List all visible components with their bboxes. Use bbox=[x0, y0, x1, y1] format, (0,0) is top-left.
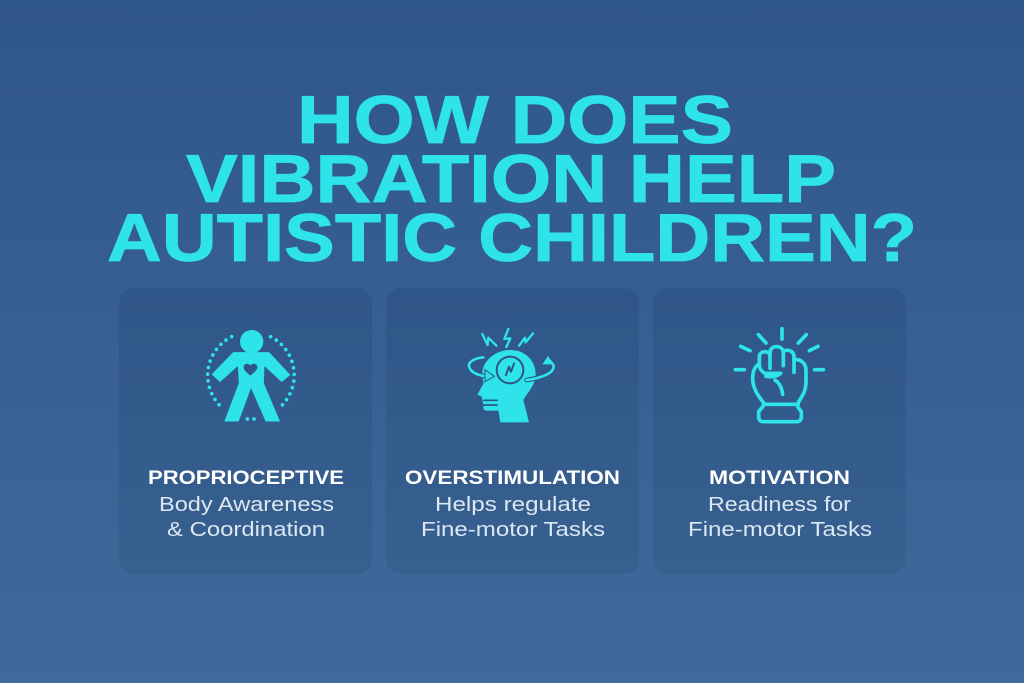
heading: motivation: MOTIVATION bbox=[709, 467, 850, 489]
description: proprioceptive: Body Awareness bbox=[159, 494, 334, 516]
title: AUTISTIC CHILDREN? bbox=[107, 200, 917, 276]
heading: overstimulation: OVERSTIMULATION bbox=[405, 467, 620, 489]
title bbox=[107, 82, 917, 276]
title: VIBRATION HELP bbox=[186, 141, 836, 217]
icon: raised fist bbox=[735, 329, 823, 422]
description: motivation bbox=[688, 494, 872, 541]
panel: motivation bbox=[653, 288, 906, 574]
heading: proprioceptive: PROPRIOCEPTIVE bbox=[148, 467, 344, 489]
icon: head with lightning bbox=[469, 329, 554, 422]
description: overstimulation: Fine-motor Tasks bbox=[421, 519, 605, 541]
description: proprioceptive bbox=[159, 494, 334, 541]
panel: proprioceptive bbox=[119, 288, 372, 574]
description: motivation: Readiness for bbox=[708, 494, 851, 516]
icon: body with heart bbox=[208, 330, 294, 421]
title: HOW DOES bbox=[297, 82, 733, 158]
description: motivation: Fine-motor Tasks bbox=[688, 519, 872, 541]
panel: overstimulation bbox=[386, 288, 639, 574]
description: proprioceptive: & Coordination bbox=[167, 519, 325, 541]
description: overstimulation: Helps regulate bbox=[435, 494, 591, 516]
description: overstimulation bbox=[421, 494, 605, 541]
